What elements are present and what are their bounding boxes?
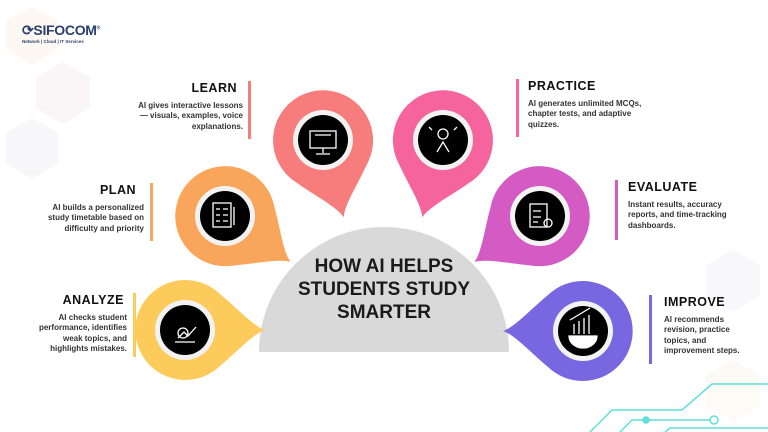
title: STUDENTS STUDY	[298, 279, 470, 300]
text: practice: PRACTICE	[528, 79, 596, 93]
text: practice	[528, 79, 641, 129]
pin: analyze	[135, 280, 265, 380]
text: practice: quizzes.	[528, 120, 559, 129]
text: evaluate: EVALUATE	[628, 180, 698, 194]
logo: ⟳SIFOCOM®	[22, 22, 100, 38]
text: plan: study timetable based on	[48, 213, 144, 222]
text: learn	[138, 81, 243, 131]
title	[298, 256, 470, 323]
text: evaluate: reports, and time-tracking	[628, 210, 727, 219]
text: plan: difficulty and priority	[64, 224, 144, 233]
text: learn: — visuals, examples, voice	[140, 111, 243, 120]
text: analyze: highlights mistakes.	[50, 344, 127, 353]
text: evaluate	[628, 180, 727, 230]
pin: learn	[262, 79, 392, 230]
text: improve: AI recommends	[664, 315, 724, 324]
text: analyze	[39, 293, 127, 353]
text: analyze: performance, identifies	[39, 323, 127, 332]
pin: practice	[374, 79, 504, 230]
icon circles	[155, 110, 613, 361]
text: improve	[664, 295, 740, 355]
text: practice: chapter tests, and adaptive	[528, 109, 631, 118]
text: analyze: ANALYZE	[63, 293, 124, 307]
text: plan	[48, 183, 144, 233]
title: SMARTER	[337, 302, 431, 323]
text: evaluate: Instant results, accuracy	[628, 200, 722, 209]
pin: improve	[503, 281, 633, 381]
pin: plan	[156, 147, 319, 303]
text: improve: revision, practice	[664, 325, 730, 334]
logo: Network | Cloud | IT Services	[22, 39, 84, 44]
text: analyze: AI checks student	[59, 313, 127, 322]
text: practice: AI generates unlimited MCQs,	[528, 99, 641, 108]
circuit lines	[590, 384, 768, 432]
text: improve: improvement steps.	[664, 346, 740, 355]
text: improve: topics, and	[664, 336, 706, 345]
title: HOW AI HELPS	[315, 256, 453, 277]
semicircle	[259, 227, 509, 352]
text: learn: AI gives interactive lessons	[138, 101, 243, 110]
text: learn: LEARN	[191, 81, 237, 95]
text: evaluate: dashboards.	[628, 221, 676, 230]
text: analyze: weak topics, and	[63, 334, 127, 343]
text: improve: IMPROVE	[664, 295, 725, 309]
pin: evaluate	[446, 147, 609, 303]
text: learn: explanations.	[192, 122, 243, 131]
text: plan: AI builds a personalized	[52, 203, 144, 212]
text: plan: PLAN	[100, 183, 136, 197]
